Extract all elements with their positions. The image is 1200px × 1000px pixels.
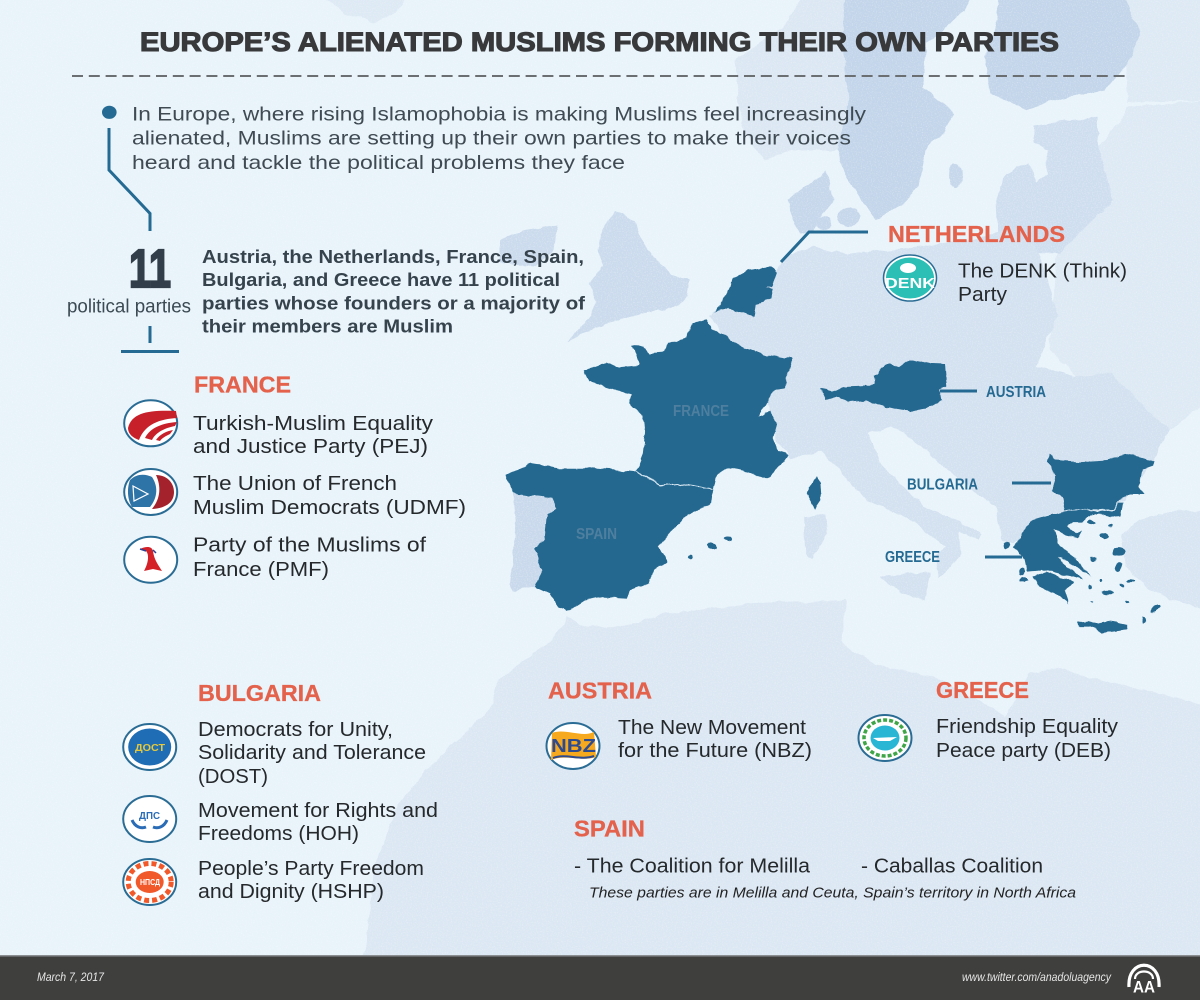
twitter url: www.twitter.com/anadoluagency [962, 972, 1112, 984]
party: Caballas Coalition: - Caballas Coalition [861, 855, 1043, 878]
logo: HOH: ДПС [139, 811, 160, 822]
stat: 11 political parties: political parties [67, 296, 191, 318]
text: DEB: Friendship Equality [936, 715, 1119, 738]
text: UDMF: Muslim Democrats (UDMF) [193, 496, 466, 519]
map callout: Austria [940, 384, 1046, 401]
logo: HSHP: НПСД [140, 878, 160, 887]
country: Spain [505, 464, 713, 612]
panel: Greece [858, 677, 1119, 762]
text: DEB: Peace party (DEB) [936, 739, 1111, 762]
connector with dot [102, 106, 150, 231]
summary text: Bulgaria, and Greece have 11 political [202, 269, 560, 290]
stat: 11 political parties: 11 [129, 239, 171, 299]
highlighted countries [505, 267, 1163, 633]
logo: HSHP [123, 859, 176, 905]
text: DOST [198, 718, 426, 788]
text: NBZ [618, 716, 812, 762]
icon: AA logo [1129, 965, 1159, 996]
map label: France: FRANCE [673, 403, 729, 420]
text: UDMF: The Union of French [193, 472, 397, 495]
heading: Greece: GREECE [936, 677, 1029, 703]
map label: Spain: SPAIN [576, 526, 617, 543]
text: HSHP: and Dignity (HSHP) [198, 880, 384, 903]
country: France [584, 318, 794, 490]
summary text [202, 246, 586, 337]
country: Greece [1003, 502, 1163, 633]
text: PEJ: Turkish-Muslim Equality [193, 412, 434, 435]
map callout: Bulgaria: BULGARIA [907, 476, 978, 494]
text: PMF: France (PMF) [193, 558, 329, 581]
map callout: Austria: AUSTRIA [986, 384, 1046, 401]
stat: 11 political parties [67, 239, 191, 318]
text: PEJ: and Justice Party (PEJ) [193, 435, 428, 458]
intro text: In Europe, where rising Islamophobia is making Muslims feel increasingly [132, 104, 866, 126]
summary text: Austria, the Netherlands, France, Spain, [202, 246, 584, 267]
country: Netherlands [714, 267, 778, 318]
logo: DENK [884, 255, 936, 301]
logo: DOST [123, 724, 176, 770]
stat bracket [121, 326, 179, 352]
text: NBZ: for the Future (NBZ) [618, 739, 812, 762]
text: DENK: The DENK (Think) [958, 260, 1127, 283]
summary text: parties whose founders or a majority of [202, 293, 586, 314]
heading: Netherlands: NETHERLANDS [888, 221, 1065, 247]
text: HSHP [198, 857, 424, 903]
country: Austria [821, 359, 947, 412]
logo: DENK: DENK [885, 275, 935, 292]
text: NBZ: The New Movement [618, 716, 806, 739]
text: DENK: Party [958, 283, 1008, 306]
title: EUROPE’S ALIENATED MUSLIMS FORMING THEIR OWN PARTIES [140, 27, 1059, 57]
text: HOH: Movement for Rights and [198, 799, 438, 822]
panel: Netherlands [884, 221, 1127, 306]
party: Coalition for Melilla: - The Coalition for Melilla [574, 855, 811, 878]
country: Bulgaria [1048, 453, 1154, 511]
logo: HOH [123, 796, 176, 842]
logo: DEB [858, 715, 912, 761]
panel: France [124, 372, 466, 583]
logo: NBZ: NBZ [551, 736, 596, 756]
text: HOH: Freedoms (HOH) [198, 822, 359, 845]
text: DENK [958, 260, 1127, 306]
text: DEB [936, 715, 1119, 762]
intro text: heard and tackle the political problems they face [132, 152, 625, 174]
logo: PMF [124, 537, 177, 583]
icon: AA logo: AA [1133, 978, 1155, 996]
text: DOST: (DOST) [198, 765, 268, 788]
intro text [132, 104, 866, 174]
text: HOH [198, 799, 438, 845]
heading: Austria: AUSTRIA [548, 678, 652, 704]
logo: DOST: ДОСТ [135, 742, 166, 754]
text: HSHP: People’s Party Freedom [198, 857, 424, 880]
text: PMF [193, 534, 426, 581]
logo: PEJ [124, 400, 177, 446]
footer bar [0, 955, 1200, 1000]
text: PEJ [193, 412, 434, 458]
heading: Spain: SPAIN [574, 816, 645, 842]
date: March 7, 2017 [37, 972, 105, 984]
panel: Austria [546, 678, 812, 769]
text: DOST: Democrats for Unity, [198, 718, 393, 741]
map callout: Netherlands line [781, 232, 868, 262]
text: PMF: Party of the Muslims of [193, 534, 426, 557]
map callout: Greece [885, 549, 1022, 566]
Balearic islands [688, 537, 733, 560]
logo: NBZ [546, 723, 600, 769]
logo: UDMF [124, 469, 177, 515]
map callout: Greece: GREECE [885, 549, 940, 566]
text: DOST: Solidarity and Tolerance [198, 741, 426, 764]
heading: France: FRANCE [194, 372, 291, 398]
panel: Spain [574, 816, 1076, 902]
note: These parties are in Melilla and Ceuta, Spain’s territory in North Africa [589, 885, 1076, 902]
country: Corsica [806, 477, 821, 510]
panel: Bulgaria [123, 680, 438, 905]
text: UDMF [193, 472, 466, 519]
summary text: their members are Muslim [202, 316, 453, 337]
intro text: alienated, Muslims are setting up their own parties to make their voices [132, 128, 851, 150]
heading: Bulgaria: BULGARIA [198, 680, 321, 706]
